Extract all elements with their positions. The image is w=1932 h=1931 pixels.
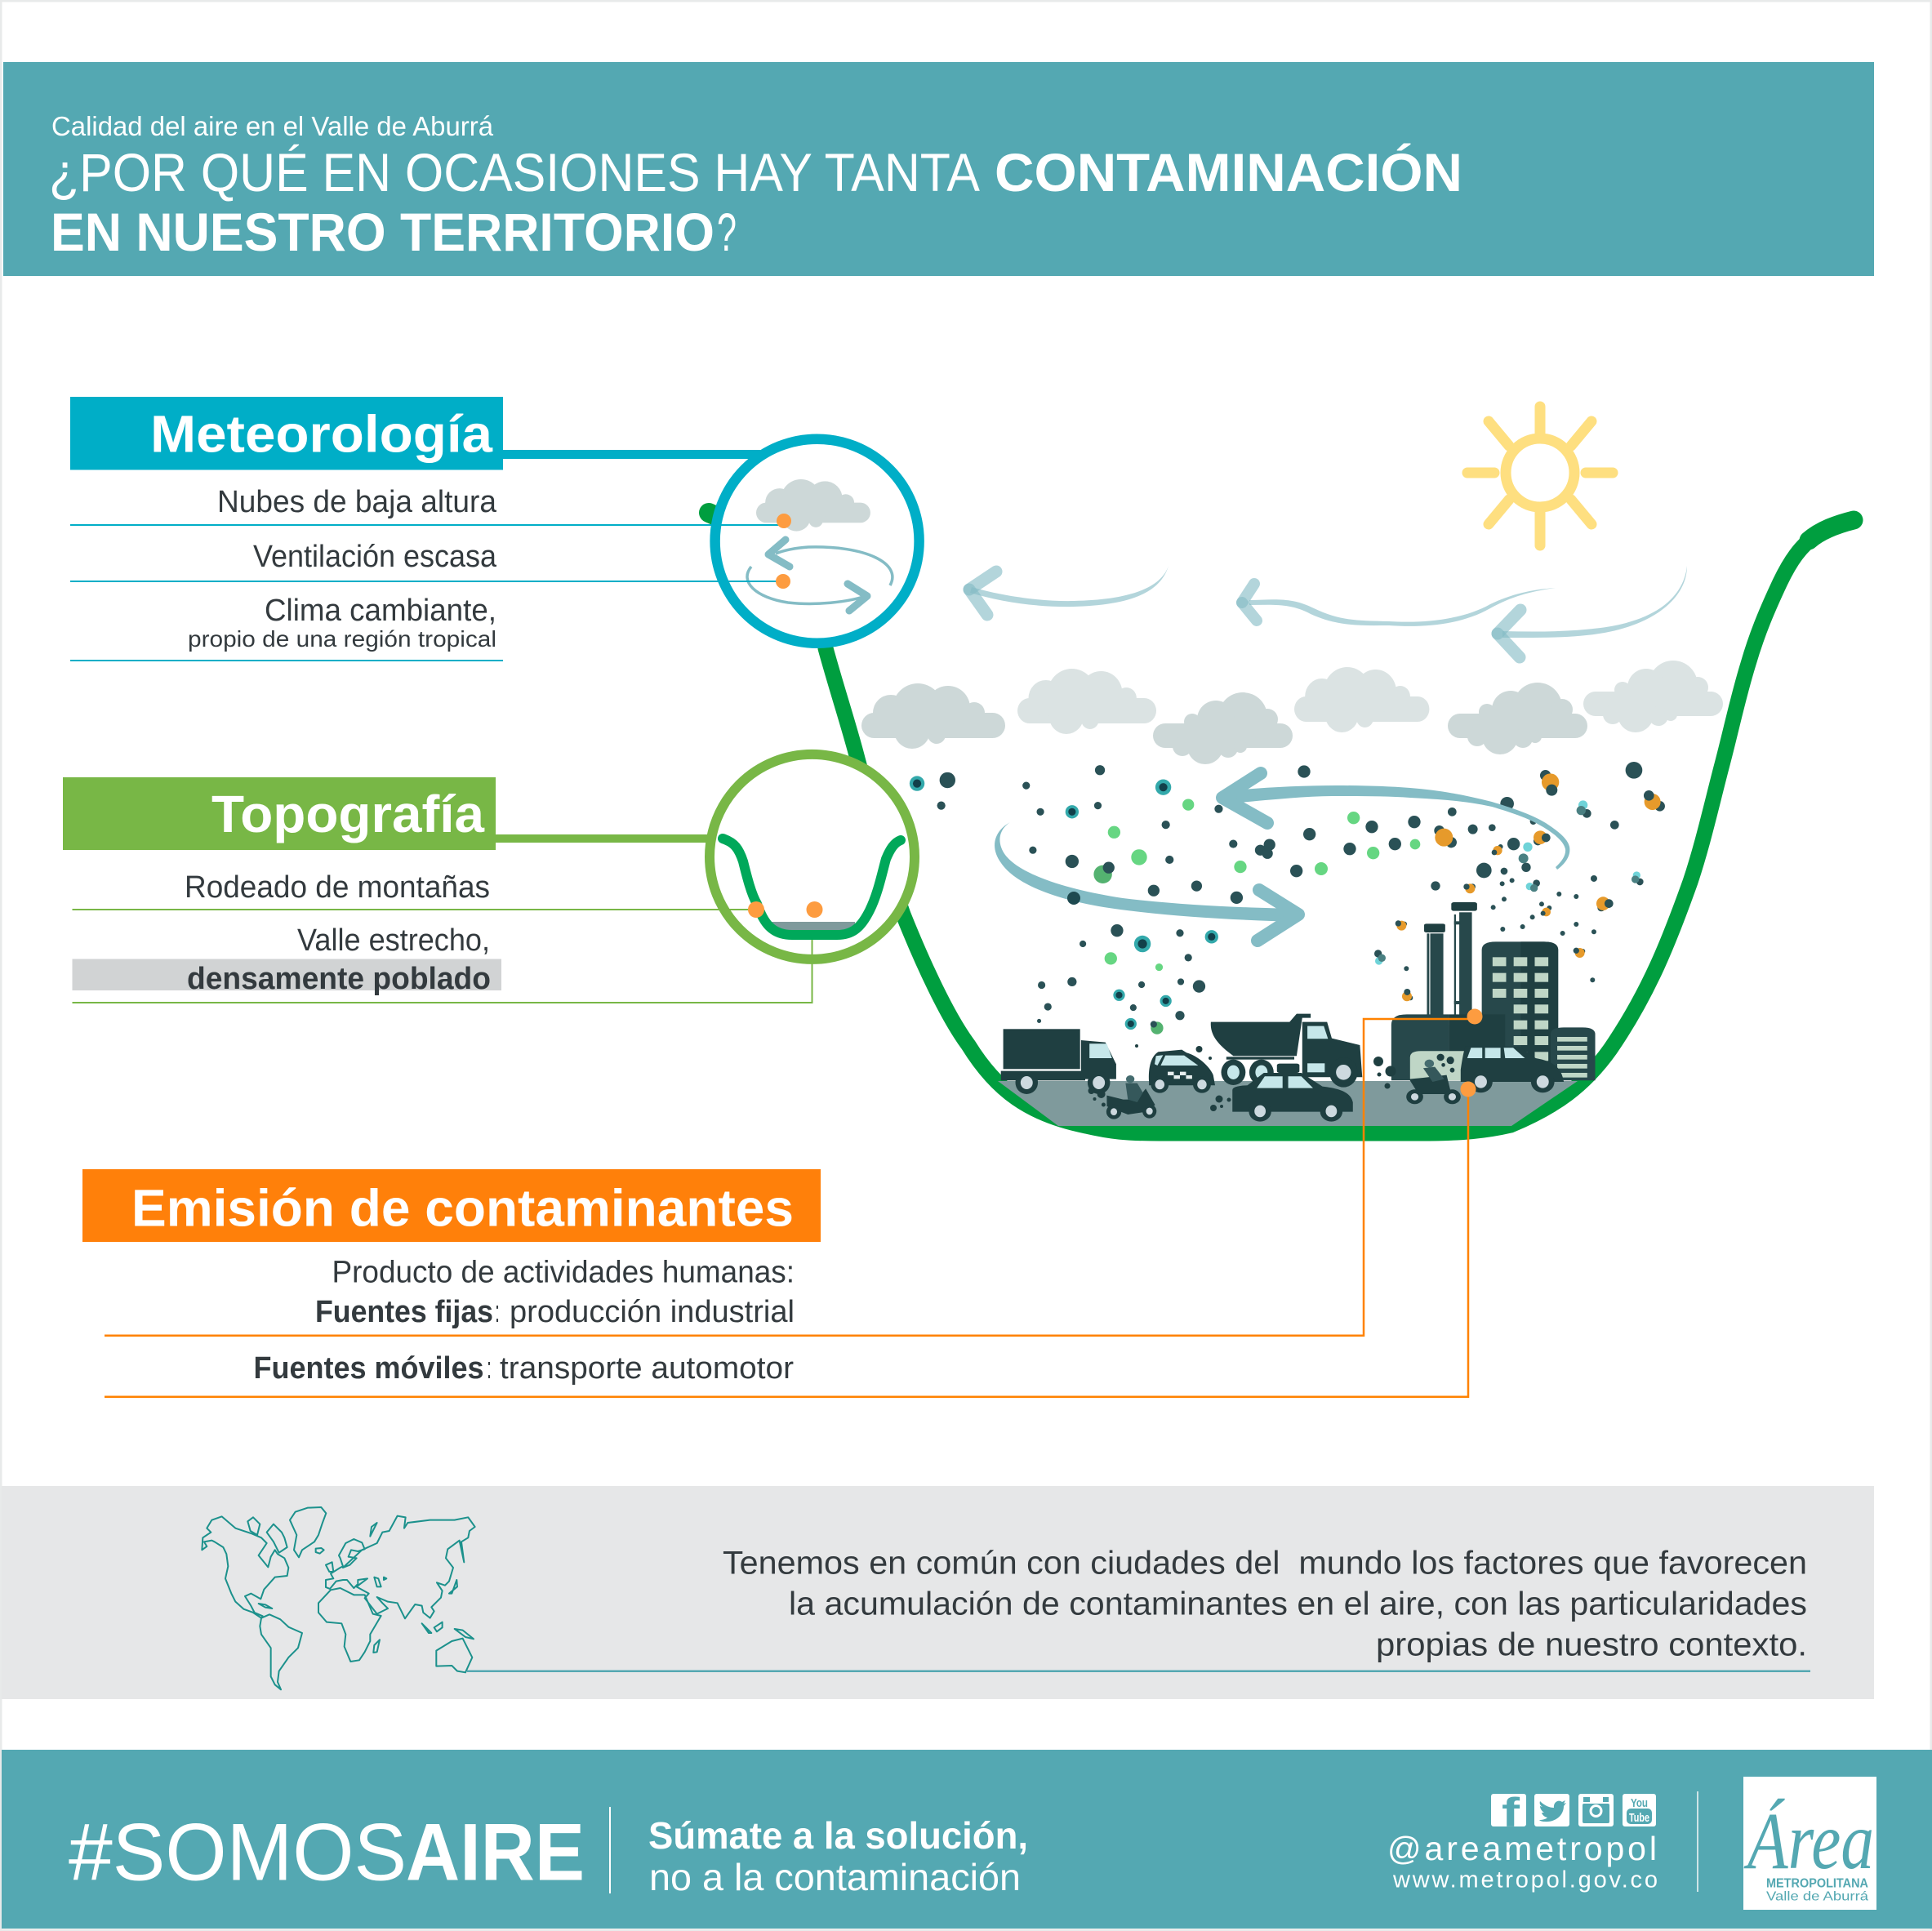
truck: [1001, 1029, 1116, 1094]
topography panel: [63, 777, 709, 996]
emissions heading: Emisión de contaminantes: [131, 1179, 794, 1238]
emissions items: Fuentes fijas: [315, 1295, 493, 1329]
hashtag: #SOMOS: [69, 1806, 407, 1898]
icon: facebook: [1491, 1790, 1526, 1835]
hashtag: AIRE: [406, 1806, 585, 1898]
pollution particles left: [910, 765, 1275, 1034]
footer banner: [2, 1750, 1932, 1929]
topography heading: [63, 777, 496, 850]
emissions items: Fuentes móviles: [253, 1351, 483, 1386]
valley curve: [709, 513, 1854, 1133]
context text: [723, 1545, 1807, 1662]
context text: propias de nuestro contexto.: [1376, 1626, 1807, 1662]
hashtag: [69, 1806, 585, 1898]
road: [998, 1081, 1578, 1126]
main title: ?: [717, 202, 737, 262]
logo: [1743, 1777, 1876, 1910]
slogan: [648, 1814, 1028, 1898]
topography items: Valle estrecho,: [297, 923, 490, 958]
meteorology heading: Meteorología: [150, 405, 492, 464]
topography magnifier circle: [72, 754, 915, 1003]
topography heading: Topografía: [211, 785, 484, 843]
world context band: [2, 1486, 1874, 1699]
magnifier wind arrows: [747, 540, 893, 611]
emissions items: producción industrial: [510, 1295, 795, 1329]
header banner: [3, 62, 1874, 276]
context text: Tenemos en común con ciudades del mundo los factores que favorecen: [723, 1545, 1807, 1581]
meteorology items: propio de una región tropical: [188, 626, 496, 652]
emissions panel: [82, 1169, 821, 1386]
logo: Área: [1743, 1795, 1874, 1886]
meteorology leader lines: [70, 514, 791, 589]
icon: facebook: f: [1502, 1790, 1520, 1835]
main title: ¿POR QUÉ EN OCASIONES HAY TANTA: [49, 142, 980, 202]
logo: Valle de Aburrá: [1766, 1889, 1868, 1904]
social handle: @areametropol: [1387, 1830, 1657, 1867]
factory: [1391, 902, 1596, 1080]
icon: youtube: [1623, 1794, 1656, 1826]
meteorology items: [188, 485, 497, 652]
icon: youtube: You: [1631, 1796, 1648, 1810]
main title: EN NUESTRO TERRITORIO: [51, 202, 714, 262]
lower arrow: [995, 822, 1298, 941]
upper arrow: [1222, 773, 1569, 870]
pollution particles right: [1290, 762, 1665, 1001]
main title: [49, 142, 1462, 262]
city vehicles and factory: [1001, 902, 1596, 1122]
motorcycle: [1406, 1060, 1461, 1104]
topography items: densamente poblado: [187, 962, 491, 996]
meteorology items: Clima cambiante,: [265, 594, 496, 628]
logo: METROPOLITANA: [1766, 1876, 1868, 1891]
emissions items: Producto de actividades humanas:: [332, 1256, 795, 1290]
emissions items: :: [487, 1351, 492, 1386]
wind arrow 3: [1502, 566, 1687, 638]
SUV: [1461, 1047, 1564, 1092]
icon: youtube: Tube: [1629, 1811, 1649, 1825]
topography items: Rodeado de montañas: [185, 870, 490, 905]
emissions leader lines: [105, 1009, 1483, 1397]
dump truck: [1211, 1014, 1362, 1088]
world map: [202, 1507, 475, 1689]
circulation arrows: [995, 773, 1569, 941]
topography highlight: [72, 959, 501, 990]
mini valley: [723, 839, 901, 935]
context text: la acumulación de contaminantes en el aire, con las particularidades: [789, 1586, 1807, 1622]
car: [1232, 1064, 1353, 1122]
slogan: no a la contaminación: [649, 1856, 1021, 1898]
emissions items: transporte automotor: [500, 1351, 794, 1386]
social icons: [1491, 1790, 1656, 1835]
icon: instagram: [1578, 1794, 1614, 1826]
wind arrow 2: [1249, 588, 1556, 626]
scooter: [1106, 1075, 1156, 1119]
clouds: [861, 661, 1723, 764]
meteorology magnifier circle: [70, 439, 919, 643]
emissions items: [253, 1256, 795, 1386]
sun: [1467, 407, 1613, 545]
wind arrows: [969, 566, 1687, 657]
meteorology items: Nubes de baja altura: [217, 485, 497, 519]
meteorology heading: [70, 397, 503, 470]
meteorology panel: [70, 397, 768, 661]
subtitle: Calidad del aire en el Valle de Aburrá: [51, 111, 494, 141]
icon: twitter: [1534, 1794, 1569, 1826]
main title: CONTAMINACIÓN: [995, 142, 1462, 202]
slogan: Súmate a la solución,: [648, 1814, 1028, 1857]
topography leader lines: [72, 901, 823, 1003]
taxi: [1149, 1050, 1215, 1093]
wind arrow 1: [970, 566, 1169, 607]
magnifier cloud: [756, 479, 870, 532]
meteorology items: Ventilación escasa: [253, 540, 497, 574]
website: www.metropol.gov.co: [1392, 1866, 1658, 1893]
mini road: [772, 922, 855, 932]
topography items: [185, 870, 491, 996]
emissions items: :: [495, 1295, 500, 1329]
exhaust particles near vehicles: [1088, 1044, 1396, 1111]
